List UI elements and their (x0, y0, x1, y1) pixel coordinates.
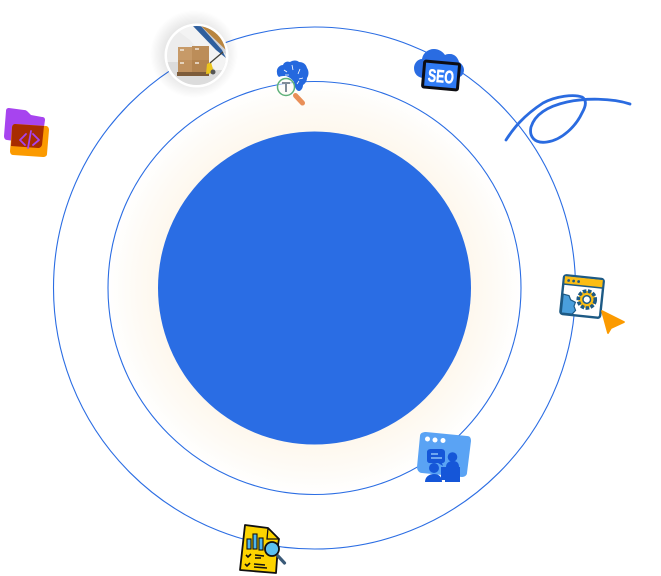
icon: settings window with cursor (560, 275, 624, 333)
icon: brain with magnifier (277, 60, 308, 103)
icon: warehouse pallet photo (155, 15, 233, 93)
icon: video meeting window (417, 432, 471, 482)
icon: code folder (4, 108, 49, 157)
soft glow behind central circle (108, 82, 520, 494)
central blue circle (158, 132, 471, 444)
icon: report with magnifier (240, 525, 284, 573)
SEO tablet screen: SEO (427, 65, 455, 88)
decorative scribble signature (506, 96, 630, 142)
icon: SEO cloud tablet (414, 49, 464, 90)
middle orbit ring (108, 82, 521, 494)
outer orbit ring (54, 27, 576, 549)
